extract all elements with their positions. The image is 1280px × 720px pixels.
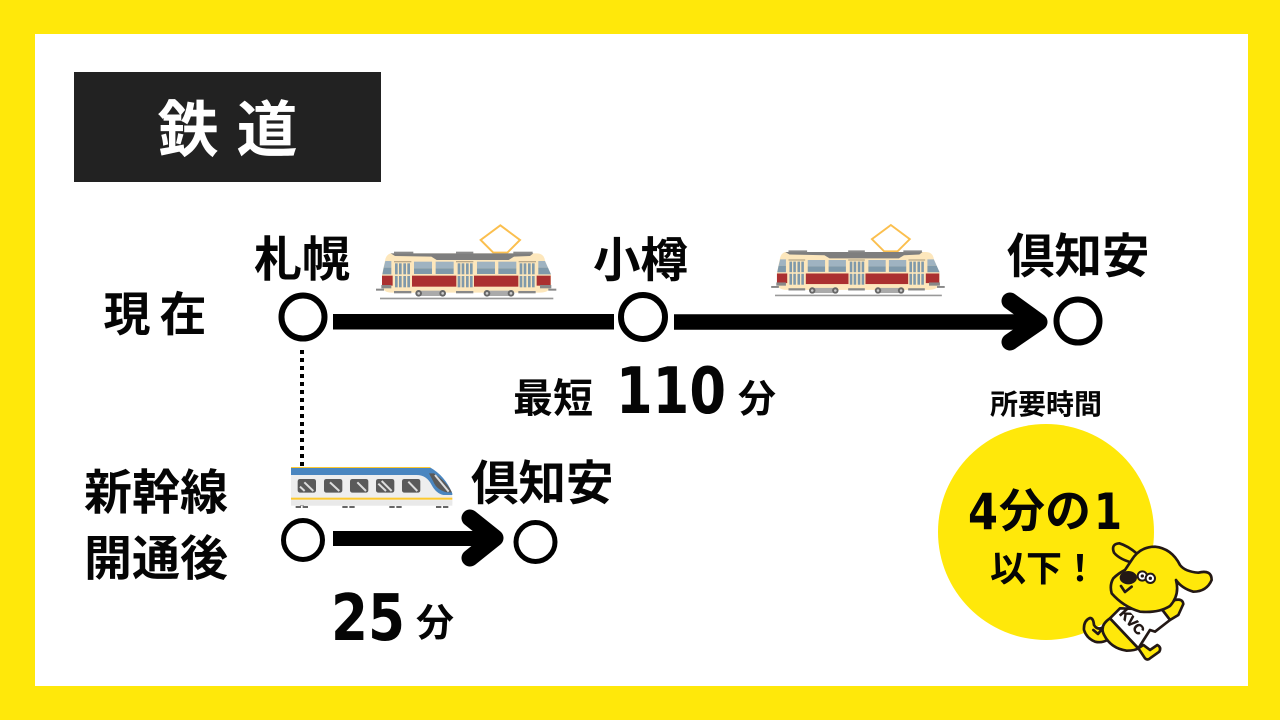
tram illustration 1: [376, 225, 556, 299]
tram illustration 2: [771, 225, 945, 296]
current route: Kutchan station marker: [1056, 300, 1100, 342]
title: 道: [236, 80, 298, 169]
current route: arrow to Kutchan: [674, 301, 1039, 342]
callout circle: 1: [1094, 483, 1122, 541]
title: 鉄: [158, 80, 219, 169]
callout circle: 以下！: [990, 540, 1098, 592]
current travel time: 110: [616, 355, 726, 429]
row label: current: [104, 276, 206, 345]
row label: current: 在: [160, 276, 206, 345]
title: [74, 72, 381, 182]
current route: Otaru station marker: [621, 295, 665, 339]
current route: line Sapporo to Otaru: [333, 314, 614, 330]
current travel time: [513, 355, 776, 429]
Shinkansen travel time: 分: [416, 592, 454, 647]
station label: Kutchan current: 倶知安: [1007, 218, 1150, 287]
Shinkansen travel time: 25: [331, 582, 405, 656]
station label: Kutchan Shinkansen: 倶知安: [471, 445, 614, 514]
row label: current: 現: [104, 276, 150, 345]
Shinkansen route: Kutchan station marker: [516, 522, 555, 562]
row label: after Shinkansen opening: 新幹線: [84, 453, 228, 523]
current travel time: 最短: [513, 366, 593, 424]
Shinkansen route: arrow: [333, 518, 495, 558]
required time label: 所要時間: [990, 383, 1102, 423]
mascot: [1084, 543, 1212, 659]
callout circle: [938, 424, 1154, 640]
station label: Otaru: 小樽: [593, 222, 688, 291]
current travel time: 分: [738, 368, 776, 423]
shinkansen illustration: [291, 467, 452, 508]
callout circle: 分の: [999, 475, 1091, 541]
row label: after Shinkansen opening: [84, 453, 228, 589]
row label: after Shinkansen opening: 開通後: [84, 519, 228, 589]
dotted connector: [300, 350, 304, 510]
Shinkansen route: Sapporo station marker: [284, 520, 322, 560]
mascot: KVC: [1116, 605, 1148, 638]
station label: Sapporo: 札幌: [254, 220, 350, 290]
callout circle: 4: [968, 483, 998, 541]
current route: Sapporo station marker: [282, 296, 324, 338]
